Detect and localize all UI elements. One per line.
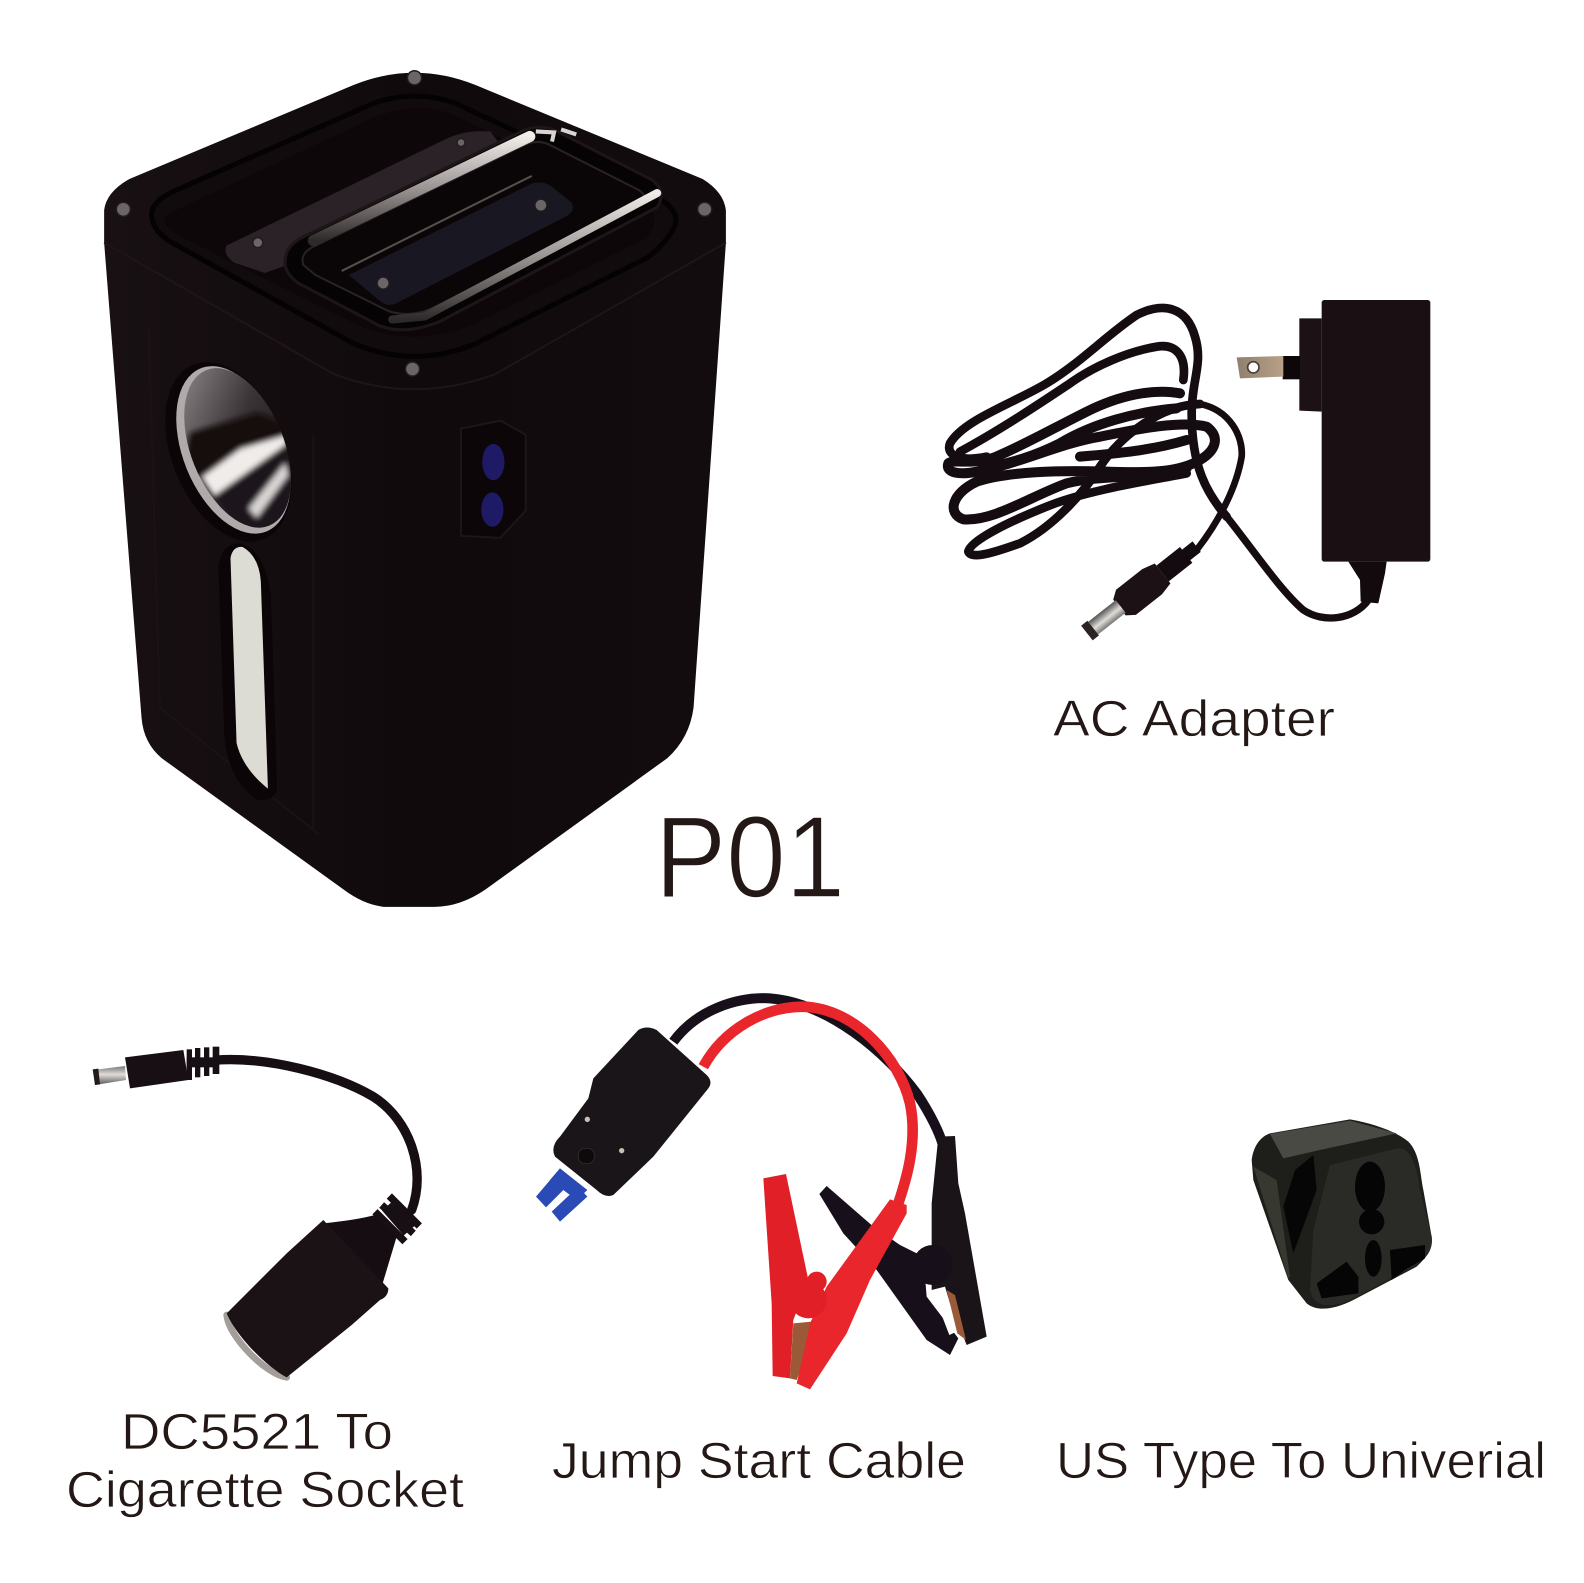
glossy black wedge [1283,1155,1317,1253]
handle back rail [313,136,530,241]
line 2: Cigarette Socket [66,1461,464,1518]
plug relief [1156,539,1203,581]
plug barrel [1109,561,1173,620]
socket metal rim [227,1315,287,1377]
top cap edge [104,243,726,389]
adapter left side [1253,1167,1290,1278]
handle front rail [392,193,657,319]
flashlight surround [141,344,316,560]
adapter body [1322,300,1430,562]
jump start cable photo [536,998,987,1389]
red clamp handle [797,1199,907,1389]
socket body [227,1220,388,1377]
label: AC Adapter: AC Adapter [1053,690,1335,747]
cigarette cable [217,1060,417,1210]
reflector shading [186,410,291,528]
adapter cords [948,308,1368,618]
USB ports [481,444,504,527]
reflector lower streak [249,463,288,518]
red clamp pivot [790,1272,827,1318]
adapter top highlight [1270,1121,1397,1158]
reflector white streak [202,435,288,495]
screws [116,71,712,376]
box button [578,1148,594,1164]
plug prong root [1283,356,1300,379]
socket holes [1317,1162,1425,1298]
universal plug adapter photo [1252,1119,1432,1309]
red clamp teeth [790,1322,812,1380]
DC plug [1077,534,1207,646]
handle frame recess [285,127,661,330]
plug prong [1237,356,1283,378]
control box [553,1027,710,1196]
black clamp gap [933,1287,957,1335]
prong hole [1248,362,1259,373]
blue EC connector [536,1168,587,1222]
handle corner highlights [536,129,576,142]
label: DC5521 To Cigarette Socket [66,1403,464,1518]
line 1: DC5521 To [121,1403,393,1460]
reflector base [184,368,291,528]
flashlight reflector [184,368,291,528]
plug end cap [1081,621,1099,640]
black clamp handle [932,1136,987,1345]
reflector dark band [186,410,284,479]
DC plug end [93,1069,100,1085]
plug metal tip [1088,600,1126,634]
red clamp left jaw [763,1174,808,1378]
plug base [1299,318,1322,412]
handle inner frame [302,142,644,314]
DC plug metal tip [93,1066,126,1085]
black clamp teeth [947,1290,966,1340]
plate edge line [342,176,532,271]
black clamp arm [819,1186,958,1355]
box screws [585,1117,624,1153]
grey handle plate [225,131,506,273]
DC plug ribs [187,1047,219,1080]
label: Jump Start Cable: Jump Start Cable [552,1432,966,1489]
lower side panel edges [149,329,318,834]
reflector lower dark [204,439,291,528]
black cable [673,998,943,1147]
adapter silhouette [1252,1119,1432,1309]
AC adapter photo [948,300,1430,646]
cigarette socket cable photo [93,1047,419,1377]
red cable [703,1007,913,1203]
label: US Type To Univerial: US Type To Univerial [1056,1432,1546,1489]
light strip [231,547,268,789]
adapter strain relief [1348,562,1387,603]
DC plug body [125,1050,188,1088]
flashlight reflector rim [154,349,313,550]
inner top panel [165,108,655,337]
socket strain relief ribs [375,1196,419,1242]
front face [1310,1148,1432,1305]
main unit: P01 power station [104,71,726,907]
title: P01: P01 [655,792,845,922]
dark blue plate [349,182,573,305]
body silhouette [104,73,726,907]
socket cone [323,1215,397,1287]
port panel [461,421,526,538]
black clamp pivot [913,1245,953,1285]
top recess ring [152,96,676,356]
light strip surround [218,544,277,800]
